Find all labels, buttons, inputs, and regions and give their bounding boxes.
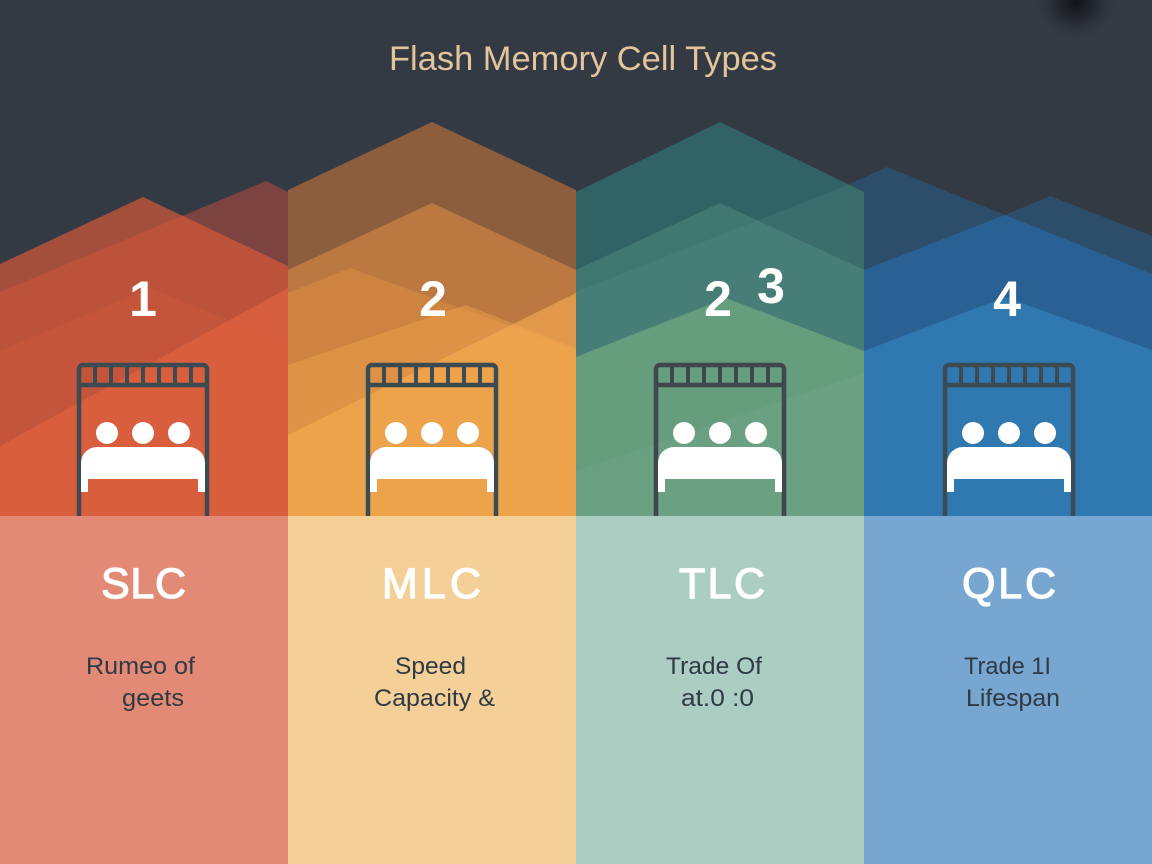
number 3: 3 <box>757 258 785 314</box>
description: SLC <box>86 653 195 712</box>
label: SLC: SLC <box>101 560 186 608</box>
layered peaks: SLC <box>0 181 288 516</box>
label: QLC: QLC <box>962 560 1056 608</box>
number 2: 2 <box>419 271 447 327</box>
icon: bed <box>945 365 1073 516</box>
description: MLC: Speed <box>395 653 466 680</box>
description: MLC <box>374 653 495 712</box>
icon: bed <box>79 365 207 516</box>
panel: SLC <box>0 181 288 864</box>
layered peaks: MLC <box>288 122 576 516</box>
dark smudge <box>1032 0 1120 43</box>
description: QLC: Trade 1I <box>964 653 1051 680</box>
icon: bed <box>368 365 496 516</box>
title: Flash Memory Cell Types <box>389 40 777 78</box>
description: QLC: Lifespan <box>966 685 1060 712</box>
icon: bed <box>656 365 784 516</box>
label: TLC: TLC <box>679 560 765 608</box>
number 1: 1 <box>129 271 157 327</box>
number 4: 4 <box>993 271 1021 327</box>
lower card: SLC <box>0 516 288 864</box>
description: TLC: at.0 :0 <box>681 685 754 712</box>
lower card: TLC <box>576 516 864 864</box>
panel: MLC <box>288 122 576 864</box>
lower card: QLC <box>864 516 1152 864</box>
description: SLC: Rumeo of <box>86 653 195 680</box>
panel: QLC <box>850 167 1152 864</box>
description: MLC: Capacity & <box>374 685 495 712</box>
description: QLC <box>964 653 1060 712</box>
description: SLC: geets <box>122 685 184 712</box>
layered peaks: TLC <box>576 122 864 516</box>
lower card: MLC <box>288 516 576 864</box>
label: MLC: MLC <box>382 560 481 608</box>
description: TLC: Trade Of <box>666 653 762 680</box>
panel: TLC <box>576 122 864 864</box>
description: TLC <box>666 653 762 712</box>
number 2: 2 <box>704 271 732 327</box>
layered peaks: QLC <box>850 167 1152 516</box>
